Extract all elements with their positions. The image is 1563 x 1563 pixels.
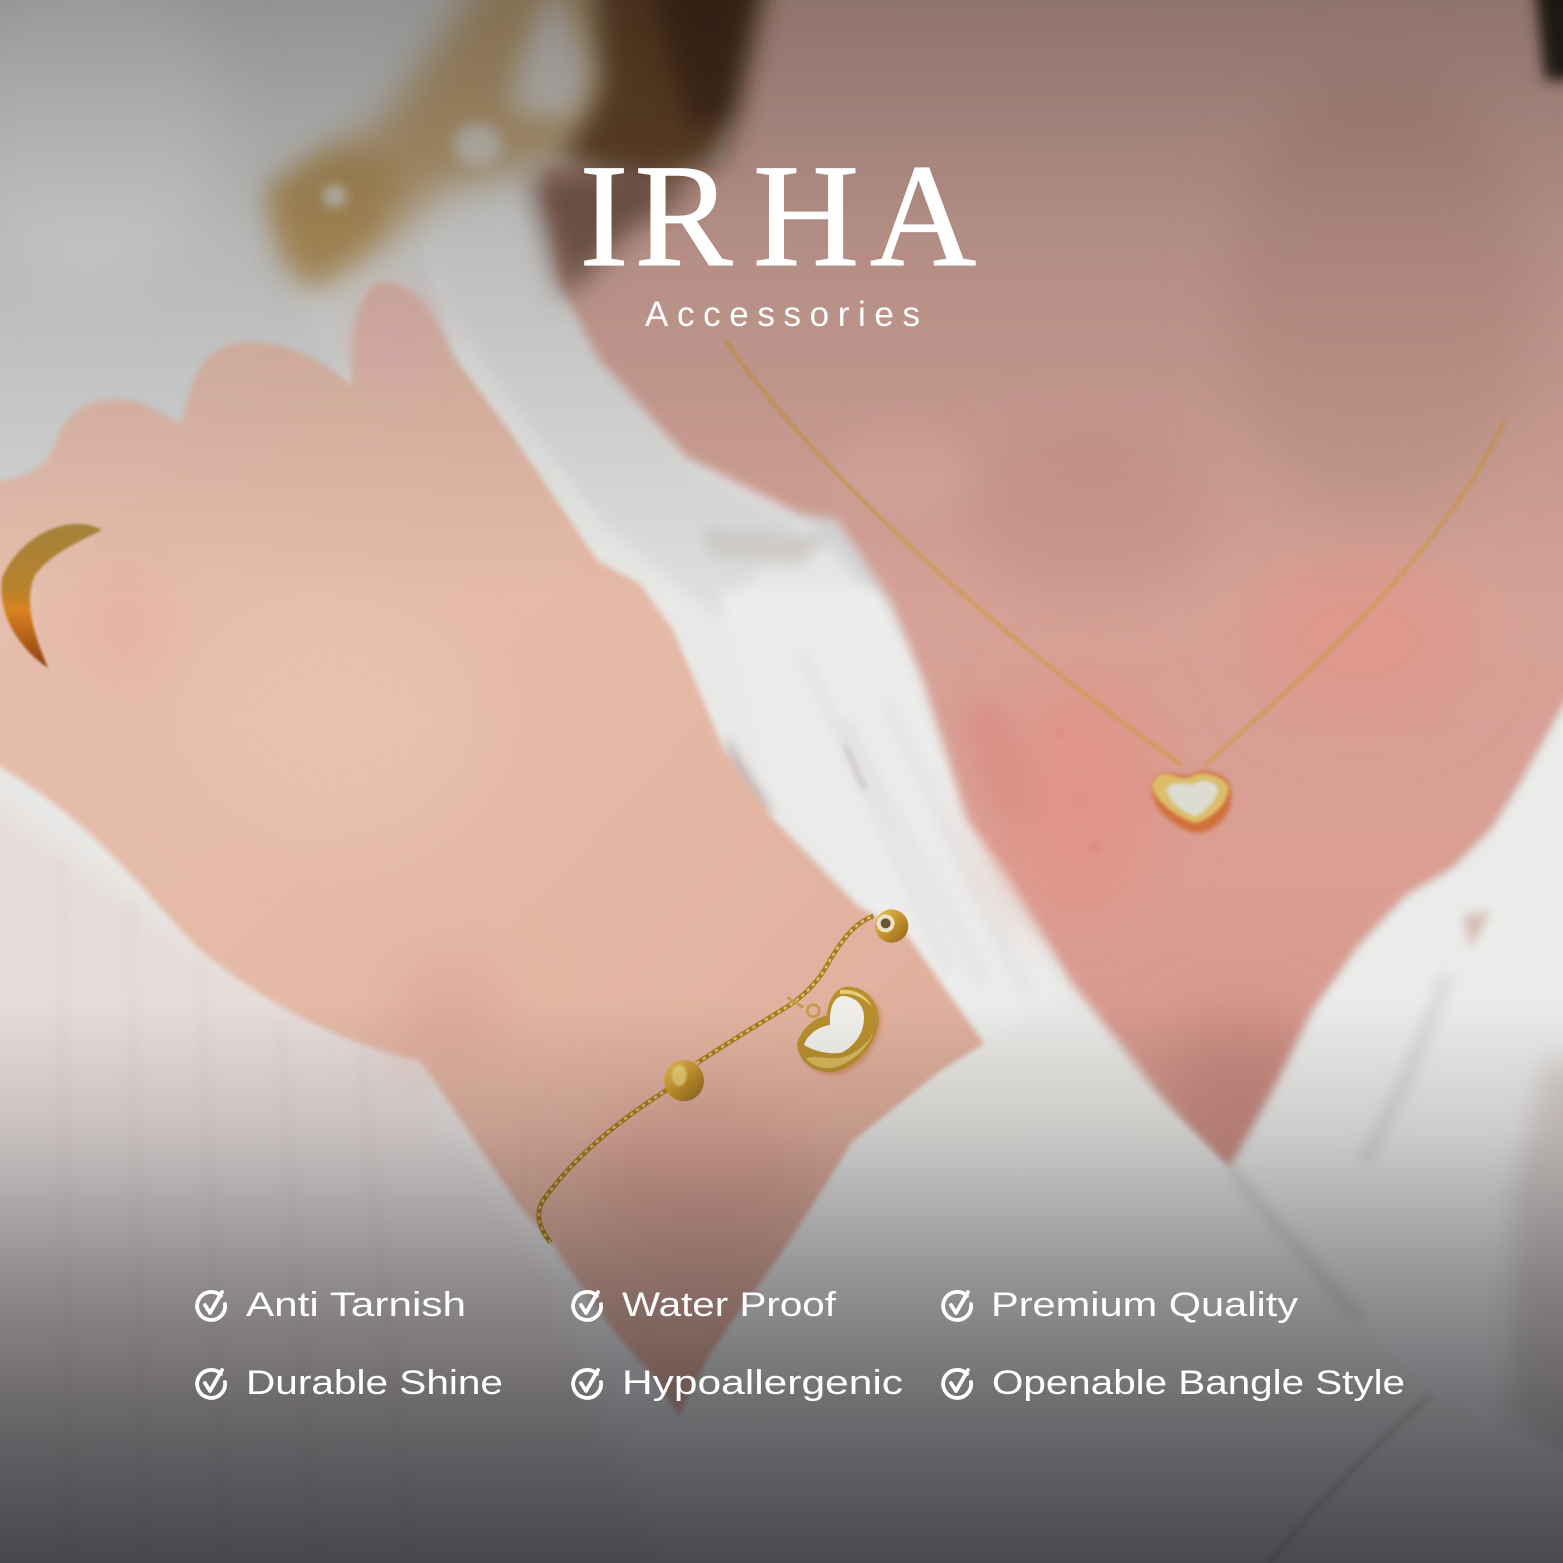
chest and neck skin bbox=[544, 0, 1563, 1170]
feature: anti tarnish: Anti Tarnish bbox=[246, 1286, 466, 1324]
feature: hypoallergenic bbox=[573, 1364, 903, 1402]
jump ring bbox=[787, 997, 819, 1017]
feature: durable shine: Durable Shine bbox=[246, 1364, 503, 1402]
feature: anti tarnish bbox=[197, 1286, 466, 1324]
necklace chain bbox=[725, 340, 1505, 765]
shirt cuff bbox=[653, 1040, 1563, 1563]
ring on finger bbox=[1, 524, 102, 668]
end bead bbox=[875, 909, 908, 943]
title: brand name: IRHA bbox=[580, 134, 976, 297]
collar shadow beside hand bbox=[726, 735, 775, 815]
chain bbox=[539, 916, 873, 1243]
shirt pleats bbox=[800, 650, 1030, 1000]
top dark gradient overlay bbox=[0, 0, 1563, 600]
heart pendant necklace bbox=[1152, 771, 1231, 833]
round bead bbox=[664, 1060, 704, 1101]
feature: openable bangle style: Openable Bangle Style bbox=[992, 1364, 1405, 1402]
feature: water proof bbox=[573, 1286, 837, 1324]
hand and wrist bbox=[0, 282, 985, 1417]
bracelet bbox=[539, 909, 908, 1243]
feature: hypoallergenic: Hypoallergenic bbox=[622, 1364, 903, 1402]
feature list bbox=[197, 1286, 1405, 1402]
feature: premium quality: Premium Quality bbox=[991, 1286, 1298, 1324]
heart charm bbox=[797, 987, 882, 1075]
subtitle: Accessories bbox=[645, 295, 920, 334]
hair bbox=[270, 0, 1563, 300]
feature: water proof: Water Proof bbox=[622, 1286, 837, 1324]
right collar of shirt bbox=[1230, 620, 1563, 1563]
bottom dark gradient overlay bbox=[0, 1000, 1563, 1563]
